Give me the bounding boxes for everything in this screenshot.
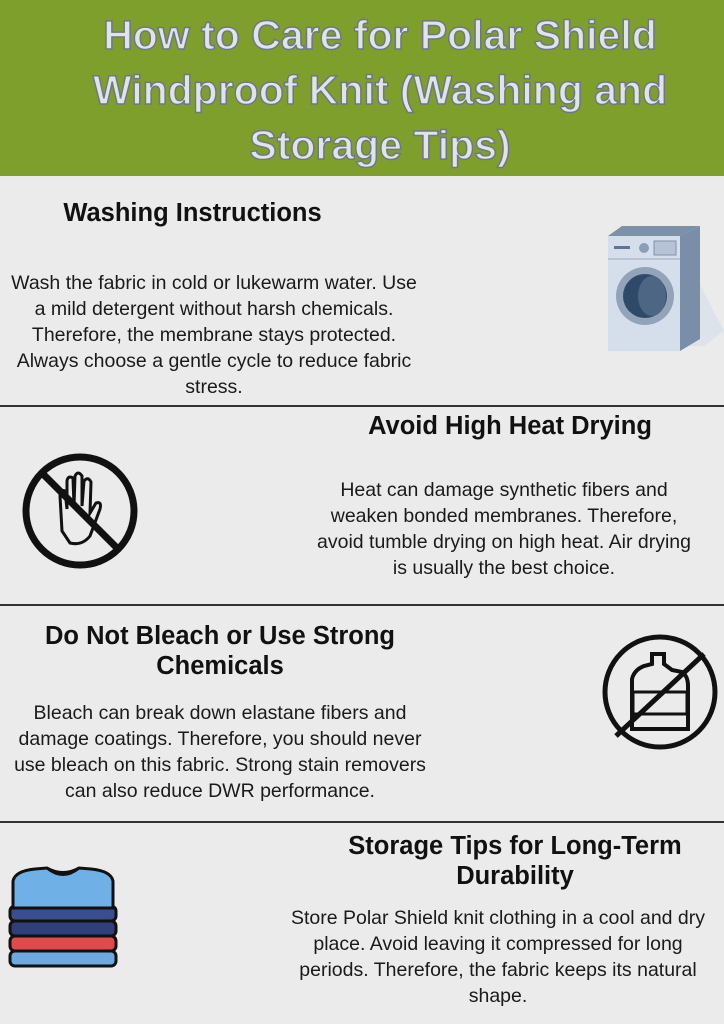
text: storage: periods. Therefore, the fabric keeps its natural (299, 959, 697, 981)
panel: storage tips (8, 832, 705, 1007)
heading: heat: Avoid High Heat Drying (368, 412, 652, 440)
text: bleach: use bleach on this fabric. Strong stain removers (14, 754, 426, 776)
text: heat: Heat can damage synthetic fibers and (340, 479, 668, 501)
icon: washing machine (608, 226, 724, 351)
panel: washing instructions (11, 199, 724, 398)
text: heat: weaken bonded membranes. Therefore, (331, 505, 677, 527)
header banner (0, 0, 724, 176)
heading: bleach (45, 622, 395, 680)
heading: storage (348, 832, 682, 890)
text: bleach (14, 702, 426, 802)
text: washing: Therefore, the membrane stays protected. (32, 324, 396, 346)
heading: storage: Storage Tips for Long-Term (348, 832, 682, 860)
heading: bleach: Do Not Bleach or Use Strong (45, 622, 395, 650)
title (92, 12, 667, 168)
text: washing (11, 272, 417, 398)
text: storage: shape. (469, 985, 527, 1007)
icon: folded clothes stack (8, 866, 118, 968)
text: storage: Store Polar Shield knit clothing in a cool and dry (291, 907, 705, 929)
title: Storage Tips) (249, 122, 511, 168)
text: heat (317, 479, 691, 579)
heading: washing: Washing Instructions (63, 199, 322, 227)
heading: storage: Durability (456, 862, 574, 890)
text: washing: a mild detergent without harsh chemicals. (35, 298, 393, 320)
text: washing: stress. (185, 376, 243, 398)
text: heat: avoid tumble drying on high heat. Air drying (317, 531, 691, 553)
icon: no bleach (602, 634, 718, 750)
text: washing: Always choose a gentle cycle to reduce fabric (17, 350, 411, 372)
heading: bleach: Chemicals (156, 652, 284, 680)
text: heat: is usually the best choice. (393, 557, 615, 579)
text: storage (291, 907, 705, 1007)
text: storage: place. Avoid leaving it compressed for long (313, 933, 683, 955)
text: bleach: damage coatings. Therefore, you should never (19, 728, 421, 750)
panel: do not bleach (14, 622, 718, 802)
icon: no hand (22, 454, 138, 568)
title: How to Care for Polar Shield (103, 12, 657, 58)
title: Windproof Knit (Washing and (93, 67, 667, 113)
panel: avoid high heat (22, 412, 691, 579)
text: bleach: can also reduce DWR performance. (65, 780, 375, 802)
text: bleach: Bleach can break down elastane fibers and (34, 702, 406, 724)
text: washing: Wash the fabric in cold or lukewarm water. Use (11, 272, 417, 294)
